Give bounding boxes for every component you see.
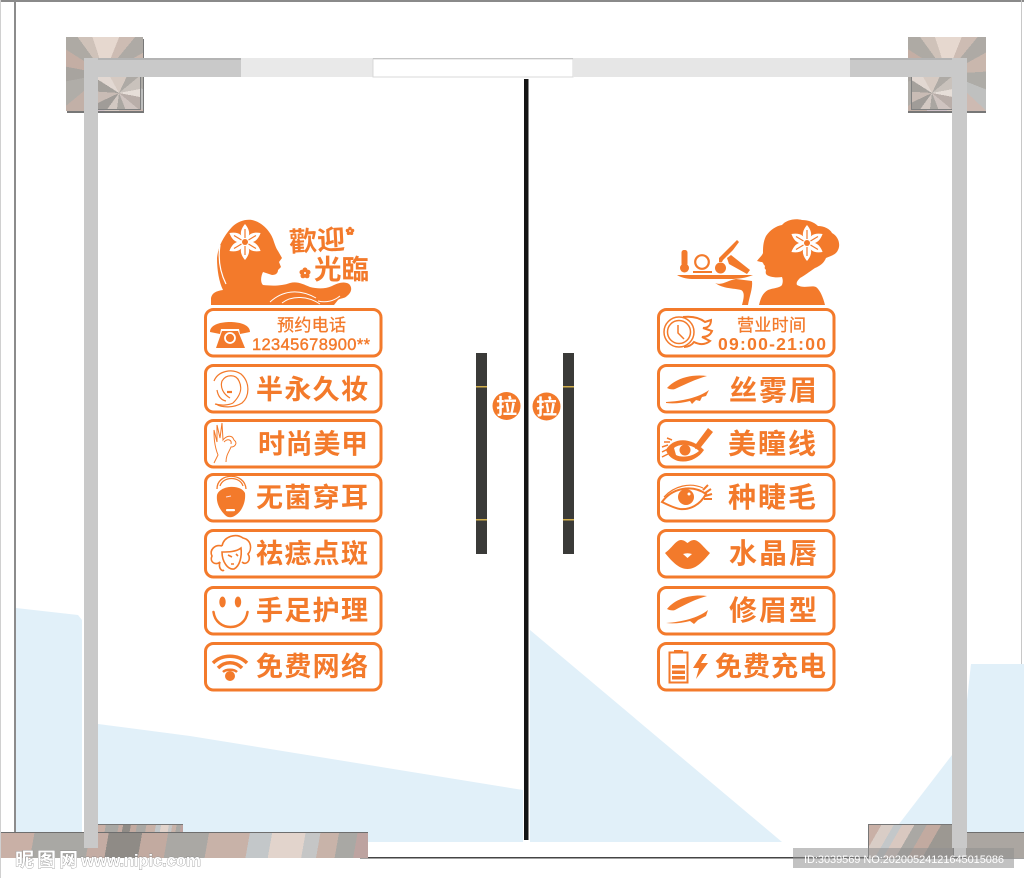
watermark: nipic logo: 昵图网 — [15, 849, 78, 871]
top-right corner metal plate — [908, 37, 986, 111]
flower on right hair — [789, 225, 825, 261]
icon: eyebrow and lash — [666, 376, 709, 404]
sign: eyeliner: 美瞳线 — [728, 428, 816, 460]
right door handle — [563, 353, 574, 554]
sign: phone booking — [206, 310, 381, 356]
sign: crystal lips: 水晶唇 — [729, 538, 817, 569]
sign: phone booking: 预约电话 — [277, 316, 346, 335]
watermark: nipic logo: www.nipic.com — [80, 851, 201, 870]
welcome calligraphy — [288, 225, 369, 285]
icon: battery and bolt — [670, 650, 708, 682]
welcome calligraphy: 歡迎 — [288, 225, 346, 257]
sign: hand and foot care: 手足护理 — [256, 596, 368, 626]
sign: misty eyebrow: 丝雾眉 — [729, 375, 817, 406]
icon: eye with lashes — [662, 485, 712, 509]
bottom-right floor plate — [868, 824, 954, 858]
sign: phone booking: 12345678900** — [252, 336, 371, 354]
sign: sterile ear piercing — [206, 474, 381, 521]
bottom-right side plate — [966, 832, 1024, 858]
sign: crystal lips — [658, 530, 834, 577]
sign: misty eyebrow — [658, 366, 834, 412]
icon: curly hair woman — [211, 536, 251, 571]
left door handle — [476, 353, 487, 554]
sign: eyebrow shaping: 修眉型 — [729, 595, 817, 626]
watermark: id bar — [793, 848, 1014, 868]
top-right inner metal plate — [911, 76, 953, 110]
watermark: id bar: ID:3039569 NO:20200524121645015086 — [804, 854, 1004, 866]
top-left corner metal plate — [66, 37, 143, 111]
left woman silhouette with flower — [211, 220, 351, 305]
sign: eyelash extension — [658, 474, 834, 521]
cosmetics tray and hand — [677, 240, 753, 305]
sign: free charging: 免费充电 — [715, 652, 826, 682]
sign: opening hours: 营业时间 — [737, 316, 806, 335]
icon: lips — [665, 540, 710, 569]
icon: covered head — [217, 476, 246, 517]
icon: clock with flames — [664, 317, 712, 347]
watermark: nipic logo — [15, 849, 201, 871]
door frame — [84, 58, 967, 848]
sign: sterile ear piercing: 无菌穿耳 — [256, 483, 368, 513]
pull badge left — [492, 392, 520, 420]
icon: face in circle — [214, 371, 248, 407]
icon: telephone — [210, 322, 250, 348]
sign: opening hours — [658, 310, 834, 356]
pull badge right: 拉 — [536, 396, 557, 420]
sign: semi-permanent makeup — [206, 366, 381, 412]
icon: wifi — [213, 656, 247, 681]
sign: opening hours: 09:00-21:00 — [718, 334, 826, 354]
sign: mole and spot removal: 祛痣点斑 — [256, 539, 368, 569]
sign: free charging — [658, 644, 834, 690]
sign: fashion nails: 时尚美甲 — [258, 430, 368, 460]
sign: free wifi — [206, 644, 381, 690]
sign: semi-permanent makeup: 半永久妆 — [256, 375, 368, 405]
top-left inner metal plate — [97, 76, 141, 110]
right woman silhouette with flower — [757, 219, 839, 305]
bottom-left small metal plate — [98, 824, 183, 833]
sign: eyebrow shaping — [658, 588, 834, 634]
sign: fashion nails — [206, 420, 381, 467]
bottom-left floor plate — [1, 832, 368, 858]
icon: hand outline — [214, 423, 236, 463]
icon: eye and pen — [662, 428, 713, 462]
icon: smiley — [214, 596, 248, 627]
sign: eyeliner — [658, 420, 834, 467]
pull badge right — [532, 392, 560, 420]
flower on left hair — [227, 224, 263, 260]
icon: eyebrow and lash — [666, 596, 708, 624]
sign: free wifi: 免费网络 — [256, 652, 368, 682]
sign: mole and spot removal — [206, 530, 381, 577]
sign: eyelash extension: 种睫毛 — [728, 482, 816, 513]
sign: hand and foot care — [206, 588, 381, 634]
centre door gap — [524, 79, 528, 840]
welcome calligraphy: 光臨 — [314, 255, 369, 285]
pull badge left: 拉 — [496, 395, 517, 419]
